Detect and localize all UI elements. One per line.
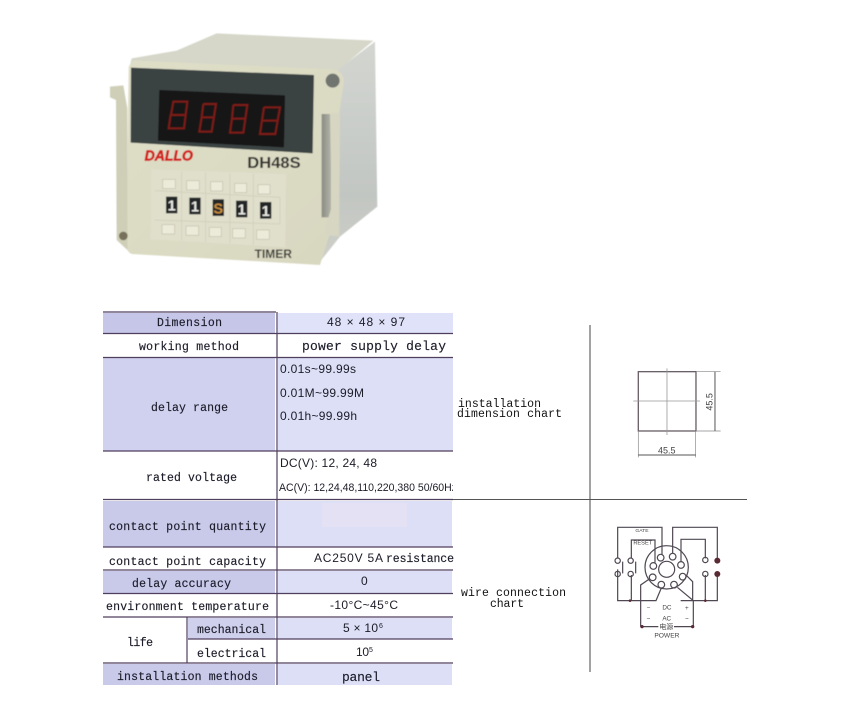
thumbwheel switch block [151, 169, 286, 247]
row: working method: working method [139, 341, 239, 354]
row: delay accuracy: 0 [361, 574, 368, 588]
label: wire connection chart [461, 587, 566, 611]
dimension value: horizontal: 45.5 [658, 445, 675, 455]
screw bottom left [119, 232, 128, 240]
plus buttons [162, 225, 269, 239]
specification table [103, 312, 457, 685]
row: installation methods [117, 670, 380, 685]
row: contact point capacity [109, 551, 454, 569]
timer top face [130, 33, 373, 73]
row: life: 5 [369, 647, 373, 654]
wiring labels: + [685, 605, 689, 612]
row: rated voltage: rated voltage [146, 472, 237, 485]
wiring labels: 电源 [659, 622, 673, 631]
table rules [103, 312, 453, 685]
socket ring [645, 546, 688, 589]
row: Dimension: Dimension [157, 317, 222, 330]
row: life: electrical [197, 648, 266, 661]
DALLO logo: DALLO [145, 148, 194, 164]
row: Dimension: 48 × 48 × 97 [327, 315, 405, 329]
wiring labels: DC [662, 604, 672, 611]
label: wire connection chart: chart [490, 598, 524, 611]
row: contact point capacity: AC250V 5A [314, 551, 383, 565]
row: life: 5 × 10 [343, 621, 378, 635]
installation dimension chart [633, 368, 721, 457]
row: life [127, 621, 383, 661]
row: working method [139, 339, 446, 354]
row: delay accuracy: delay accuracy [132, 578, 231, 591]
row: rated voltage: AC(V): 12,24,48,110,220,380 50/60Hz [279, 482, 457, 494]
row: delay accuracy [132, 574, 368, 591]
wiring labels: POWER [654, 632, 680, 639]
row: environment temperature: environment temperature [106, 601, 269, 614]
right rail [322, 114, 331, 217]
row: environment temperature [106, 598, 398, 614]
display window [158, 90, 285, 147]
dimension value: vertical: 45.5 [704, 393, 714, 411]
extension lines [638, 372, 721, 457]
wiring [618, 527, 717, 627]
cutout square [638, 372, 696, 431]
minus buttons [163, 179, 270, 194]
wiring labels [633, 528, 689, 639]
wiring labels: − [647, 605, 651, 612]
row: working method: power supply delay [302, 339, 446, 354]
row: Dimension [157, 315, 405, 330]
socket pins [649, 553, 686, 588]
chart panel frame lines [453, 325, 747, 672]
wiring labels: ~ [647, 615, 651, 622]
TIMER label: TIMER [255, 248, 293, 261]
right mounting clip [326, 113, 340, 237]
row shading [103, 313, 453, 685]
thumbwheel switch block: S [213, 201, 223, 217]
row: delay range: 0.01s~99.99s [280, 362, 356, 376]
row: rated voltage: DC(V): 12, 24, 48 [280, 456, 377, 470]
row: rated voltage [146, 456, 457, 494]
row: delay range: delay range [151, 402, 228, 415]
row: delay range: 0.01M~99.99M [280, 386, 364, 400]
red digits [169, 102, 280, 134]
digit wheels [166, 197, 271, 219]
contact terminals [615, 557, 708, 577]
timer right side [320, 42, 377, 262]
row: life: life [127, 637, 153, 650]
timer front plate [126, 61, 344, 265]
row: delay range: 0.01h~99.99h [280, 409, 357, 423]
row: delay range [151, 362, 364, 423]
wiring labels: AC [662, 615, 672, 622]
row: installation methods: installation methods [117, 671, 258, 684]
thumbwheel switch block: 1 [238, 203, 246, 219]
thumbwheel switch block: 1 [191, 200, 199, 216]
left mounting clip [110, 85, 127, 250]
product photo: DH48S timer [110, 33, 377, 265]
output terminals [629, 558, 720, 628]
wiring labels: RESET [633, 540, 653, 546]
row: life: 10 [356, 645, 369, 659]
row: installation methods: panel [342, 670, 380, 685]
row: life: mechanical [197, 624, 266, 637]
label: installation dimension chart: dimension chart [457, 408, 562, 421]
screw top right [326, 74, 340, 88]
row: contact point capacity: contact point capacity [109, 556, 266, 569]
model label DH48S: DH48S [247, 155, 301, 172]
row: contact point capacity: resistance [386, 553, 454, 566]
dimension arrows [638, 372, 715, 455]
thumbwheel switch block: 1 [168, 199, 176, 215]
label: installation dimension chart [457, 398, 562, 421]
row: environment temperature: -10°C~45°C [330, 598, 398, 612]
label: wire connection chart: wire connection [461, 587, 566, 600]
centre lines [633, 368, 700, 435]
dark display band [131, 68, 314, 153]
wire connection chart [615, 527, 720, 639]
wiring labels: GATE [635, 528, 649, 534]
thumbwheel switch block: 1 [262, 204, 270, 220]
wiring labels: ~ [685, 615, 689, 622]
row: life: 6 [379, 623, 383, 630]
row: contact point quantity: contact point quantity [109, 521, 266, 534]
label: installation dimension chart: installation [458, 398, 541, 411]
